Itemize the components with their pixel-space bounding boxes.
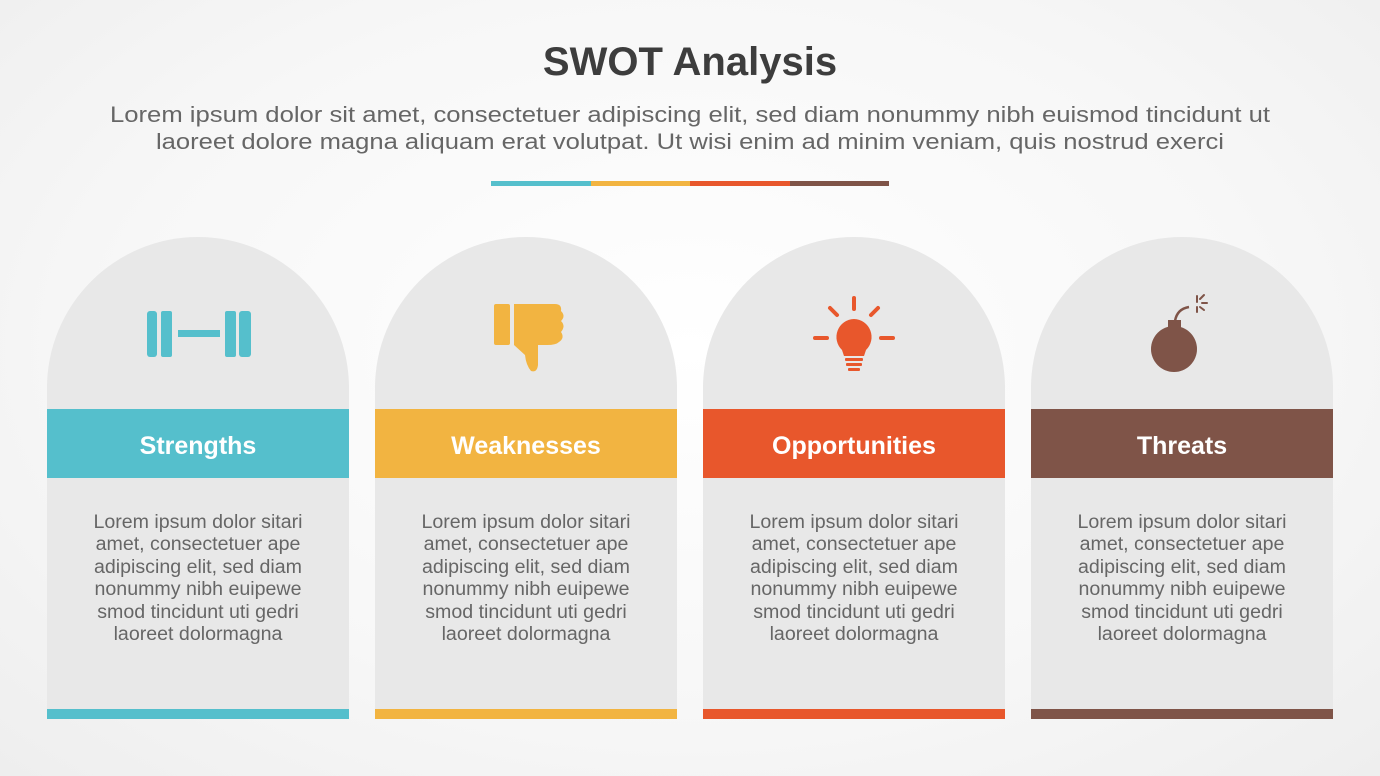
icon: light bulb [813,296,895,371]
text: weaknesses: laoreet dolormagna [442,623,610,645]
text: opportunities: amet, consectetuer ape [752,533,956,555]
header: strengths: Strengths [140,432,256,460]
subtitle: Lorem ipsum dolor sit amet, consectetuer adipiscing elit, sed diam nonummy nibh euismod tincidunt ut [110,102,1271,127]
header: threats: Threats [1137,432,1227,460]
text: opportunities: nonummy nibh euipewe [751,578,957,600]
text: weaknesses [421,511,631,645]
text: weaknesses: amet, consectetuer ape [424,533,628,555]
text: weaknesses: smod tincidunt uti gedri [425,601,627,623]
color divider [491,181,889,186]
text: strengths: smod tincidunt uti gedri [97,601,299,623]
header: threats [1031,409,1333,478]
text: opportunities: smod tincidunt uti gedri [753,601,955,623]
header: weaknesses [375,409,677,478]
text: strengths: nonummy nibh euipewe [95,578,301,600]
subtitle [110,102,1271,154]
text: threats: laoreet dolormagna [1098,623,1266,645]
text: weaknesses: adipiscing elit, sed diam [422,556,630,578]
text: strengths [93,511,303,645]
header: weaknesses: Weaknesses [451,432,601,460]
icon: dumbbell [147,311,251,357]
header: strengths [47,409,349,478]
text: strengths: adipiscing elit, sed diam [94,556,302,578]
text: opportunities: adipiscing elit, sed diam [750,556,958,578]
text: opportunities [749,511,959,645]
subtitle: laoreet dolore magna aliquam erat volutpat. Ut wisi enim ad minim veniam, quis nostrud exerci [156,129,1224,154]
icon: thumbs down [494,304,564,372]
text: opportunities: Lorem ipsum dolor sitari [749,511,959,533]
text: threats: Lorem ipsum dolor sitari [1077,511,1287,533]
panel: opportunities [703,237,1005,719]
text: threats: smod tincidunt uti gedri [1081,601,1283,623]
text: threats: amet, consectetuer ape [1080,533,1284,555]
text: threats [1077,511,1287,645]
title: SWOT Analysis [543,40,837,84]
text: opportunities: laoreet dolormagna [770,623,938,645]
text: threats: adipiscing elit, sed diam [1078,556,1286,578]
header: opportunities: Opportunities [772,432,936,460]
text: strengths: amet, consectetuer ape [96,533,300,555]
panel: threats [1031,237,1333,719]
text: strengths: laoreet dolormagna [114,623,282,645]
header: opportunities [703,409,1005,478]
icon: bomb [1151,294,1208,372]
panel: strengths [47,237,349,719]
text: weaknesses: nonummy nibh euipewe [423,578,629,600]
panel: weaknesses [375,237,677,719]
text: threats: nonummy nibh euipewe [1079,578,1285,600]
text: strengths: Lorem ipsum dolor sitari [93,511,303,533]
text: weaknesses: Lorem ipsum dolor sitari [421,511,631,533]
